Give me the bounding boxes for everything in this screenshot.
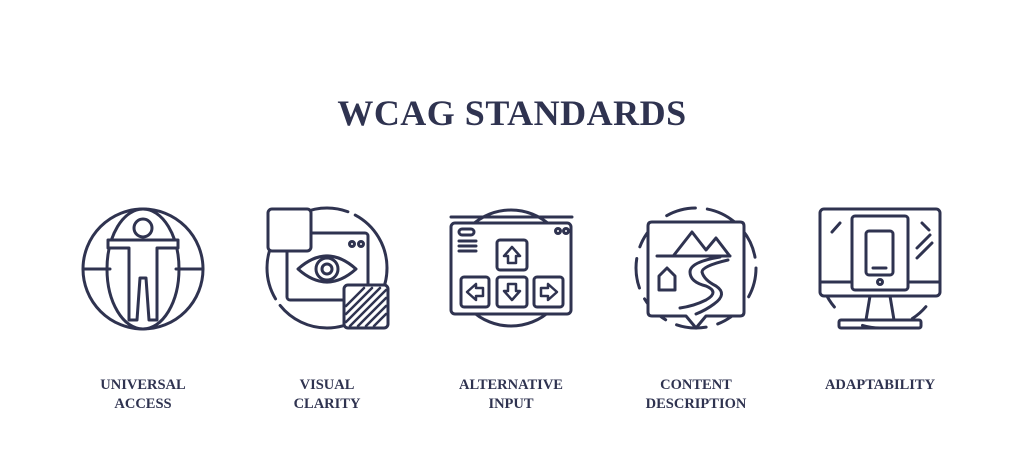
label: alternative input: INPUT (488, 396, 534, 412)
label: adaptability: ADAPTABILITY (825, 377, 936, 393)
label: visual clarity: CLARITY (294, 396, 361, 412)
icon: alternative input (451, 210, 572, 326)
label: visual clarity: VISUAL (300, 377, 354, 393)
icon: visual clarity (267, 208, 388, 328)
label: universal access: UNIVERSAL (100, 377, 186, 393)
icon: content description (636, 208, 756, 328)
icon: universal access (83, 209, 203, 329)
label: content description: DESCRIPTION (646, 396, 747, 412)
icon: adaptability (820, 208, 940, 328)
label: content description: CONTENT (660, 377, 732, 393)
title: WCAG STANDARDS (337, 93, 687, 133)
label: universal access: ACCESS (114, 396, 172, 412)
label: alternative input: ALTERNATIVE (459, 377, 563, 393)
